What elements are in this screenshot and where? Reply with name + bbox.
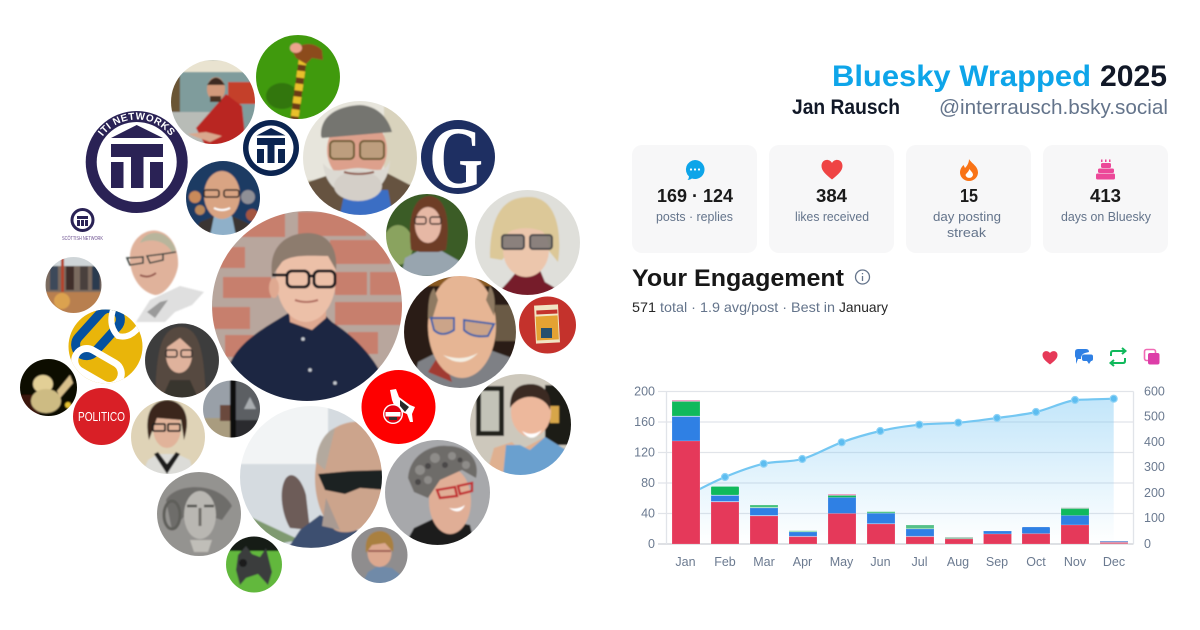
left axis labels <box>634 384 655 551</box>
avatar: woman with long hair on dark background <box>144 322 220 400</box>
chart: monthly engagement stacked bars with cumulative line <box>634 384 1165 569</box>
month labels: Feb <box>714 555 736 569</box>
bar: May <box>828 494 856 544</box>
icon: flame <box>960 159 978 181</box>
engagement summary: 571 <box>632 299 656 315</box>
avatar: curly grey haired woman with red glasses <box>384 439 492 547</box>
logo: yellow chain link <box>68 310 142 384</box>
panel: likes received <box>769 145 894 253</box>
icon: likes heart <box>1042 351 1058 364</box>
month labels: Apr <box>793 555 812 569</box>
left axis labels: 0 <box>648 537 655 551</box>
user name and handle: @interrausch.bsky.social <box>939 97 1168 119</box>
month labels: Dec <box>1103 555 1125 569</box>
logo: The Guardian: G <box>429 110 483 207</box>
panel: likes received: likes received <box>795 210 869 224</box>
logo: 1. FC Koeln goat on red <box>362 370 436 444</box>
avatar: black dog on grass <box>225 535 283 595</box>
right axis labels: 0 <box>1144 537 1151 551</box>
panel: likes received: 384 <box>816 186 847 206</box>
goat emblem <box>383 389 415 424</box>
month labels: Aug <box>947 555 969 569</box>
panel: day posting streak <box>906 145 1031 253</box>
bar: Apr <box>789 531 817 544</box>
avatar: red circle with book cover <box>519 296 576 354</box>
right axis labels: 400 <box>1144 435 1165 449</box>
icon: replies bubbles <box>1075 349 1093 364</box>
avatar: cartoon character on dark background <box>20 359 77 416</box>
title: 2025 <box>1100 60 1167 93</box>
right axis labels <box>1144 384 1165 551</box>
logo: Politico <box>73 388 130 445</box>
bar: Jul <box>906 525 934 544</box>
right axis labels: 600 <box>1144 384 1165 398</box>
panel: day posting streak: 15 <box>960 186 978 206</box>
title: Bluesky Wrapped <box>832 60 1091 93</box>
month labels: Jan <box>675 555 696 569</box>
month labels: May <box>830 555 854 569</box>
bars <box>672 400 1128 544</box>
legend icons <box>1042 348 1160 366</box>
avatar: small painted hall with child <box>45 256 103 314</box>
bar: Oct <box>1022 527 1050 544</box>
avatar: bearded man in flat cap <box>302 100 418 216</box>
avatar: tiny ITI logo with caption <box>62 208 103 242</box>
cumulative line <box>686 399 1114 496</box>
left axis labels: 80 <box>641 476 655 490</box>
panel: days on Bluesky: days on Bluesky <box>1061 210 1152 224</box>
logo: ITI Networks large <box>86 111 188 213</box>
avatar: tiny ITI logo with caption: SCÖTTISH NETWORK <box>62 235 103 242</box>
panel: day posting streak: day posting <box>933 210 1001 224</box>
panel: days on Bluesky <box>1043 145 1168 253</box>
right axis labels: 500 <box>1144 410 1165 424</box>
avatar: man in sunglasses with pigeon <box>238 404 386 550</box>
bar: Dec <box>1100 541 1128 544</box>
heading: Your Engagement: Your Engagement <box>632 265 844 292</box>
month labels: Jul <box>912 555 927 569</box>
right axis labels: 100 <box>1144 511 1165 525</box>
month labels <box>675 555 1125 569</box>
avatar: carved stone face <box>156 471 242 557</box>
engagement summary <box>632 299 888 315</box>
avatar: woman with short brown hair, striped top <box>130 399 206 476</box>
avatar: watchtower through window <box>202 379 262 439</box>
icon: birthday cake <box>1096 160 1115 180</box>
logo ring lettering: ITI NETWORKS <box>98 112 175 136</box>
engagement summary: total · 1.9 avg/post · Best in <box>660 299 835 315</box>
icon: heart <box>822 160 842 180</box>
bar: Nov <box>1061 508 1089 544</box>
bar: Jun <box>867 512 895 544</box>
left axis labels: 200 <box>634 384 655 398</box>
month labels: Mar <box>753 555 775 569</box>
right axis labels: 200 <box>1144 486 1165 500</box>
avatar: woman with auburn hair and foliage <box>383 192 469 278</box>
bar: Mar <box>750 505 778 544</box>
avatar: blonde woman in red turtleneck <box>474 189 582 297</box>
bar: Jan <box>672 400 700 544</box>
month labels: Sep <box>986 555 1008 569</box>
bar: Sep <box>984 531 1012 544</box>
logo: The Guardian <box>421 120 495 194</box>
avatar: woman in blue sleeveless top <box>469 373 573 477</box>
left axis labels: 40 <box>641 506 655 520</box>
avatar cluster <box>20 35 580 592</box>
logo: ITI small <box>243 120 299 176</box>
panel: posts and replies: 169 · 124 <box>657 186 733 206</box>
avatar: man in red shirt in train <box>170 59 256 146</box>
right axis labels: 300 <box>1144 460 1165 474</box>
icon: reposts arrows <box>1110 348 1126 366</box>
user name and handle <box>792 96 1168 119</box>
bar: Aug <box>945 537 973 544</box>
avatar: main portrait, man against brick wall <box>210 209 404 403</box>
avatar: woman with short blond hair and glasses <box>352 527 408 583</box>
avatar: bald man with city lights <box>185 160 261 236</box>
icon: info <box>856 270 870 284</box>
panel: days on Bluesky: 413 <box>1090 186 1121 206</box>
engagement summary: January <box>839 299 888 315</box>
bar: Feb <box>711 486 739 544</box>
line points <box>722 395 1117 480</box>
avatar: smiling man in bar with blue glasses <box>403 274 517 389</box>
month labels: Jun <box>870 555 891 569</box>
icon: chat bubble <box>686 160 705 180</box>
cumulative area <box>686 399 1114 544</box>
grid lines <box>658 392 1134 544</box>
left axis labels: 160 <box>634 415 655 429</box>
panel: day posting streak: streak <box>947 226 987 240</box>
avatar: cut-out man with glasses and white shirt <box>127 231 204 322</box>
icon: quotes squares <box>1144 350 1160 364</box>
panel: posts and replies: posts · replies <box>656 210 733 224</box>
left axis labels: 120 <box>634 446 655 460</box>
month labels: Nov <box>1064 555 1087 569</box>
user name and handle: Jan Rausch <box>792 96 900 119</box>
logo: Politico: POLITICO <box>78 409 125 424</box>
avatar: giraffe toy on green <box>255 34 341 122</box>
month labels: Oct <box>1026 555 1046 569</box>
panel: posts and replies <box>632 145 757 253</box>
